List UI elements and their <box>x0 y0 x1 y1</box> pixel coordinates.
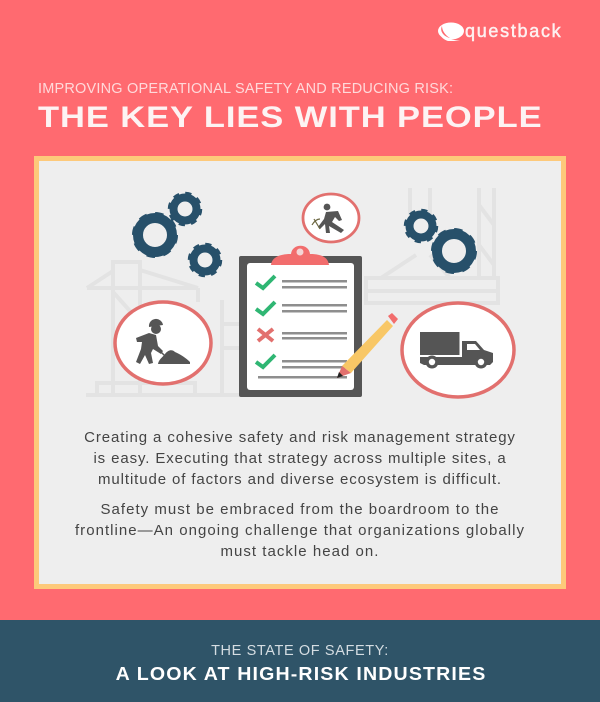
icon: digging worker <box>115 302 211 384</box>
gear <box>434 230 474 272</box>
gears right <box>406 211 474 272</box>
subtitle: IMPROVING OPERATIONAL SAFETY AND REDUCING RISK: <box>38 81 453 97</box>
footer heading: A LOOK AT HIGH-RISK INDUSTRIES <box>116 664 486 684</box>
body text: paragraph 1: multitude of factors and diverse ecosystem is difficult. <box>98 471 502 488</box>
body text: paragraph 1 <box>84 429 516 488</box>
gear <box>170 194 200 224</box>
check marks and cross <box>256 276 275 367</box>
clip <box>271 246 329 265</box>
background: cranes and scaffold <box>86 188 498 395</box>
gear <box>134 214 176 256</box>
body text: paragraph 2: Safety must be embraced from the boardroom to the <box>100 501 499 518</box>
footer band <box>0 620 600 702</box>
panel: safety illustration and text <box>34 156 566 589</box>
gear <box>406 211 436 241</box>
icon: pencil <box>337 313 398 378</box>
body text: paragraph 1: is easy. Executing that strategy across multiple sites, a <box>93 450 507 467</box>
gear <box>190 245 220 275</box>
icon: clipboard checklist <box>239 246 362 397</box>
body text: paragraph 1: Creating a cohesive safety and risk management strategy <box>84 429 516 446</box>
body text: paragraph 2: frontline—An ongoing challenge that organizations globally <box>75 522 525 539</box>
body text: paragraph 2 <box>75 501 525 560</box>
icon: truck <box>402 303 514 397</box>
title: THE KEY LIES WITH PEOPLE <box>38 101 543 134</box>
checklist lines <box>258 280 347 378</box>
body text: paragraph 2: must tackle head on. <box>220 543 380 560</box>
footer subtitle: THE STATE OF SAFETY: <box>211 643 389 659</box>
logo: questback: questback <box>465 21 562 41</box>
icon: miner <box>303 194 359 242</box>
gears left <box>134 194 220 275</box>
